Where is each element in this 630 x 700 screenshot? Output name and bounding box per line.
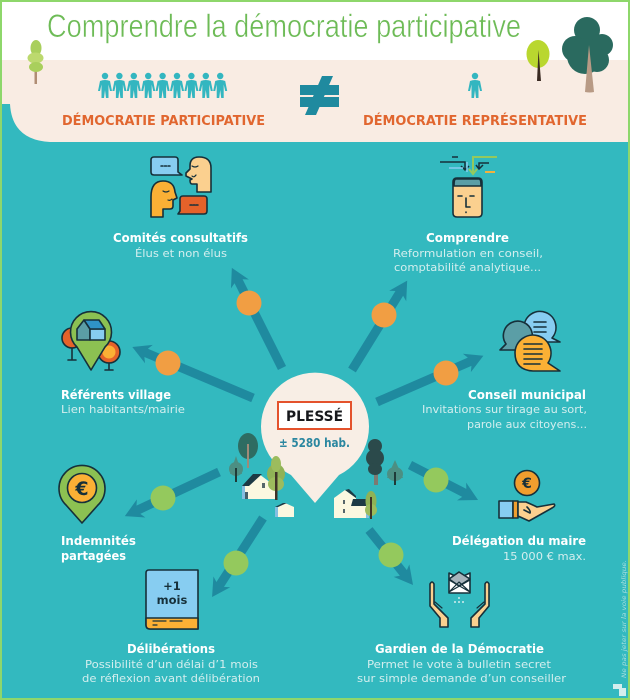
icon: lime tree [526, 40, 550, 81]
heading: Référents village [61, 388, 171, 402]
icon: speech heads [151, 157, 211, 217]
panel: indemnités [59, 465, 136, 563]
icon: recycling note [613, 684, 626, 696]
arrow: référents [128, 338, 257, 407]
arrow: gardien [361, 524, 421, 591]
person: representative [468, 73, 482, 98]
panel: conseil municipal [422, 311, 587, 431]
heading line 2: partagées [61, 549, 126, 563]
text: Invitations sur tirage au sort, [422, 403, 587, 416]
population: ± 5280 hab. [279, 436, 350, 450]
text: Reformulation en conseil, [393, 247, 543, 260]
icon: calendar book: mois [157, 593, 187, 607]
dots on arrows [150, 290, 458, 576]
icon: book face [440, 157, 497, 217]
icon: speech bubbles [500, 311, 560, 371]
text: parole aux citoyens... [467, 418, 587, 431]
arrow: comités [223, 263, 291, 372]
panel: délibérations [82, 570, 260, 685]
arrow: comprendre [343, 275, 416, 375]
text: 15 000 € max. [503, 550, 586, 563]
title: Comprendre la démocratie participative [47, 8, 521, 44]
text: Permet le vote à bulletin secret [367, 658, 552, 671]
icon: euro pin: € [74, 478, 89, 500]
icon: not equal sign [300, 76, 339, 115]
heading: Délégation du maire [452, 534, 586, 548]
header band [0, 60, 630, 142]
text: comptabilité analytique... [394, 261, 541, 274]
arrow: délégation [405, 456, 483, 509]
arrow: conseil [373, 347, 487, 411]
icon: calendar book [146, 570, 198, 629]
place name box: PLESSÉ [286, 408, 343, 425]
heading: participative: DÉMOCRATIE PARTICIPATIVE [62, 113, 265, 129]
icon: hands and envelope [430, 572, 489, 627]
place name box [278, 402, 351, 429]
panel: comprendre [393, 157, 543, 274]
envelope dots [454, 597, 464, 603]
arrow: délibérations [204, 513, 271, 602]
heading: Gardien de la Démocratie [375, 642, 544, 656]
heading: Indemnités [61, 534, 136, 548]
icon: village pin [62, 312, 120, 370]
text: Possibilité d’un délai d’1 mois [85, 658, 258, 671]
icon: left small tree [28, 40, 44, 84]
heading: Conseil municipal [468, 388, 586, 402]
heading: Comités consultatifs [113, 231, 248, 245]
panel: délégation du maire [452, 470, 586, 563]
text: sur simple demande d’un conseiller [357, 672, 567, 685]
village left [229, 433, 294, 517]
icon: calendar book: +1 [163, 579, 181, 593]
arrow: indemnités [121, 463, 223, 525]
vertical note: Ne pas jeter sur la voie publique. [621, 560, 628, 678]
panel: gardien de la démocratie [357, 572, 567, 685]
text: Lien habitants/mairie [61, 403, 185, 416]
heading: Délibérations [127, 642, 215, 656]
heading: Comprendre [426, 231, 509, 245]
village right [334, 439, 403, 519]
people row: participative [98, 73, 227, 98]
text: Élus et non élus [135, 247, 227, 260]
panel: comités consultatifs [113, 157, 248, 260]
panel: référents village [61, 312, 185, 416]
icon: coin and hand: € [521, 476, 532, 492]
heading: representative: DÉMOCRATIE REPRÉSENTATIVE [363, 113, 587, 129]
text: de réflexion avant délibération [82, 672, 260, 685]
centre bubble [261, 373, 369, 503]
icon: big dark tree [562, 17, 613, 92]
